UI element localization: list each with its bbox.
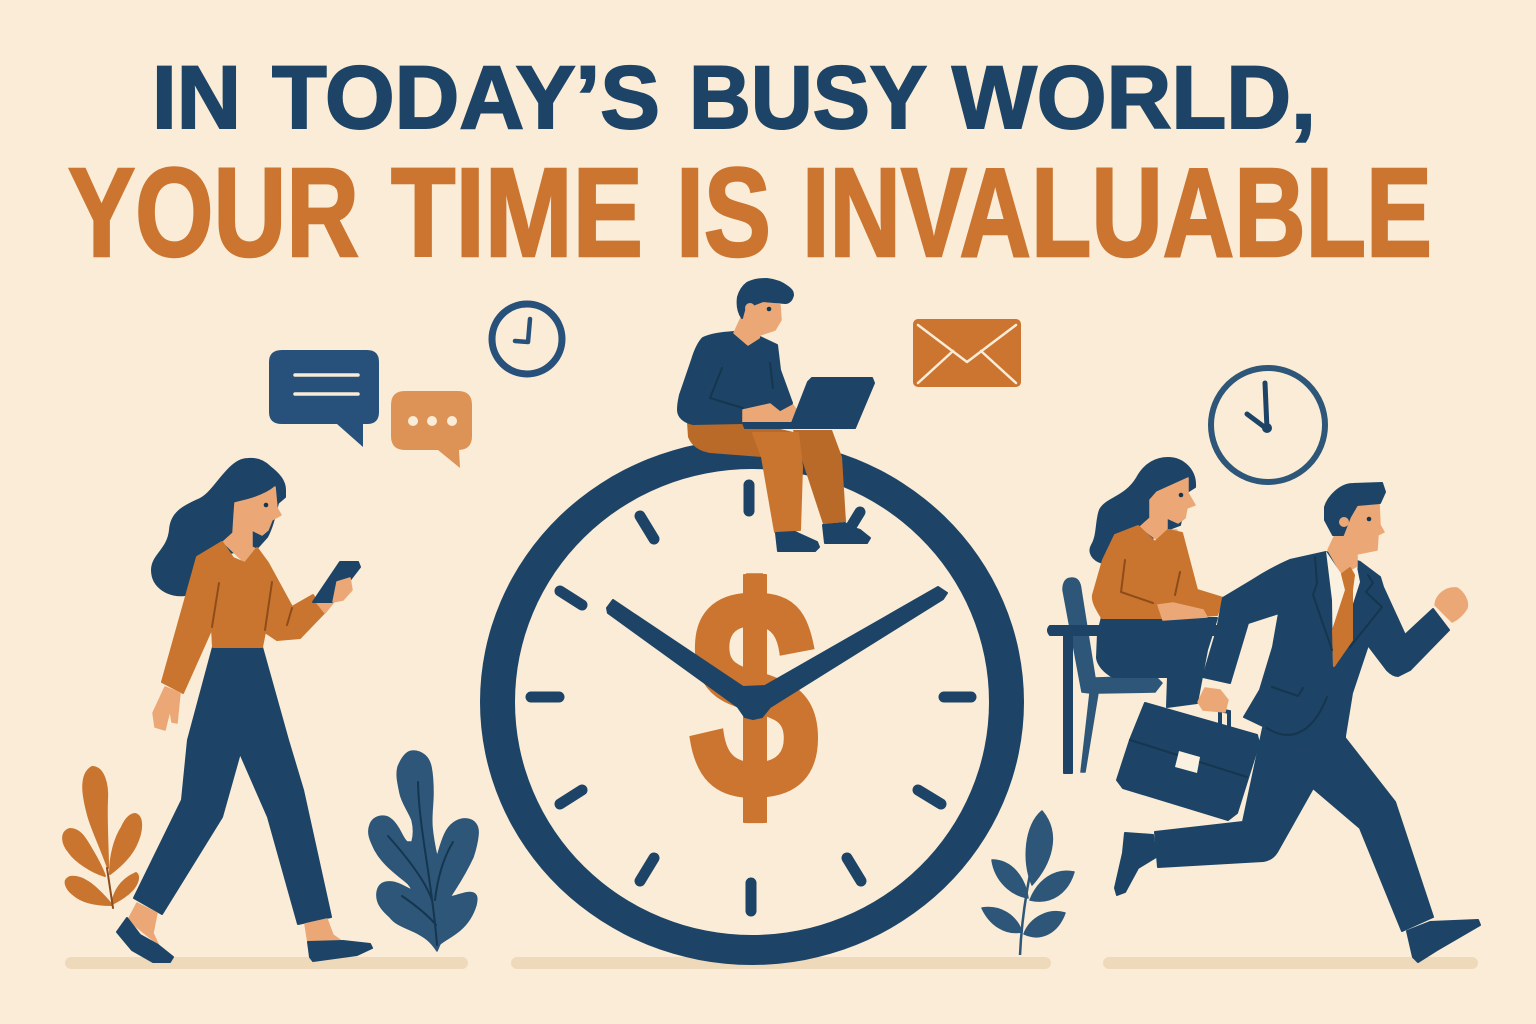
icon: envelope [913,319,1021,387]
title line 1: TODAY’S [272,47,660,147]
title line 1: IN [152,47,241,147]
eye [1179,493,1183,497]
left hand [153,687,180,730]
ground shadows [65,957,1478,969]
plant: orange left [63,767,141,908]
desk [1048,626,1217,773]
icon: small clock [492,304,562,374]
hand on handle [1198,688,1228,712]
plant: navy left [369,751,478,951]
ear and eye [1339,517,1371,527]
thigh [687,420,798,457]
hands [743,404,798,422]
sweater creases [212,582,292,630]
arm creases [710,363,773,408]
phone [313,562,360,602]
title line 2: TIME [391,142,643,283]
right hand upper [333,578,352,602]
sweater [1093,526,1223,618]
title line 2: IS [676,142,771,283]
shirt [1326,551,1360,666]
legs [1155,720,1433,931]
icon: chat bubble navy [269,350,379,447]
hair [1325,483,1385,535]
legs [134,647,331,924]
person: man on clock with laptop [678,279,874,551]
title line 2: YOUR [68,142,359,283]
laptop [743,378,874,428]
right hand lower [317,603,333,613]
person: running man with briefcase [1115,483,1480,962]
legs [1097,617,1217,707]
neck and face [734,301,781,345]
hour tick marks [531,485,971,911]
fist [1435,588,1467,622]
person: seated woman at desk [1048,458,1223,773]
ear and eye [745,303,771,313]
hair [1090,458,1195,563]
title line 1: WORLD, [952,47,1316,147]
hair [738,279,793,318]
sweater [162,542,324,693]
clock ring [480,439,1024,965]
dollar sign: $ [689,527,819,861]
plant: navy right [982,811,1074,955]
feet [128,903,343,944]
shoes [1115,833,1156,895]
neck and face [223,487,281,563]
big clock with dollar sign [480,439,1024,965]
shoes [117,918,372,962]
near leg [753,433,802,532]
chair [1063,578,1162,772]
eye [264,503,268,507]
torso [678,332,792,424]
hand [1158,603,1207,620]
hair [152,459,285,595]
icon: chat bubble orange [391,391,472,468]
neck and face [1140,478,1195,542]
briefcase [1117,703,1259,820]
title line 1 [152,47,1316,147]
shoes [776,532,819,551]
title line 2 [68,142,1432,283]
sweater creases [1121,560,1180,603]
neck and face [1328,503,1384,575]
clock hands [607,587,947,719]
jacket creases [1267,557,1382,735]
icon: wall clock right [1211,368,1325,482]
far leg [793,430,846,524]
person: walking woman with phone [117,459,372,962]
tie [1333,568,1354,666]
title line 1: BUSY [689,47,927,147]
jacket [1203,552,1449,738]
